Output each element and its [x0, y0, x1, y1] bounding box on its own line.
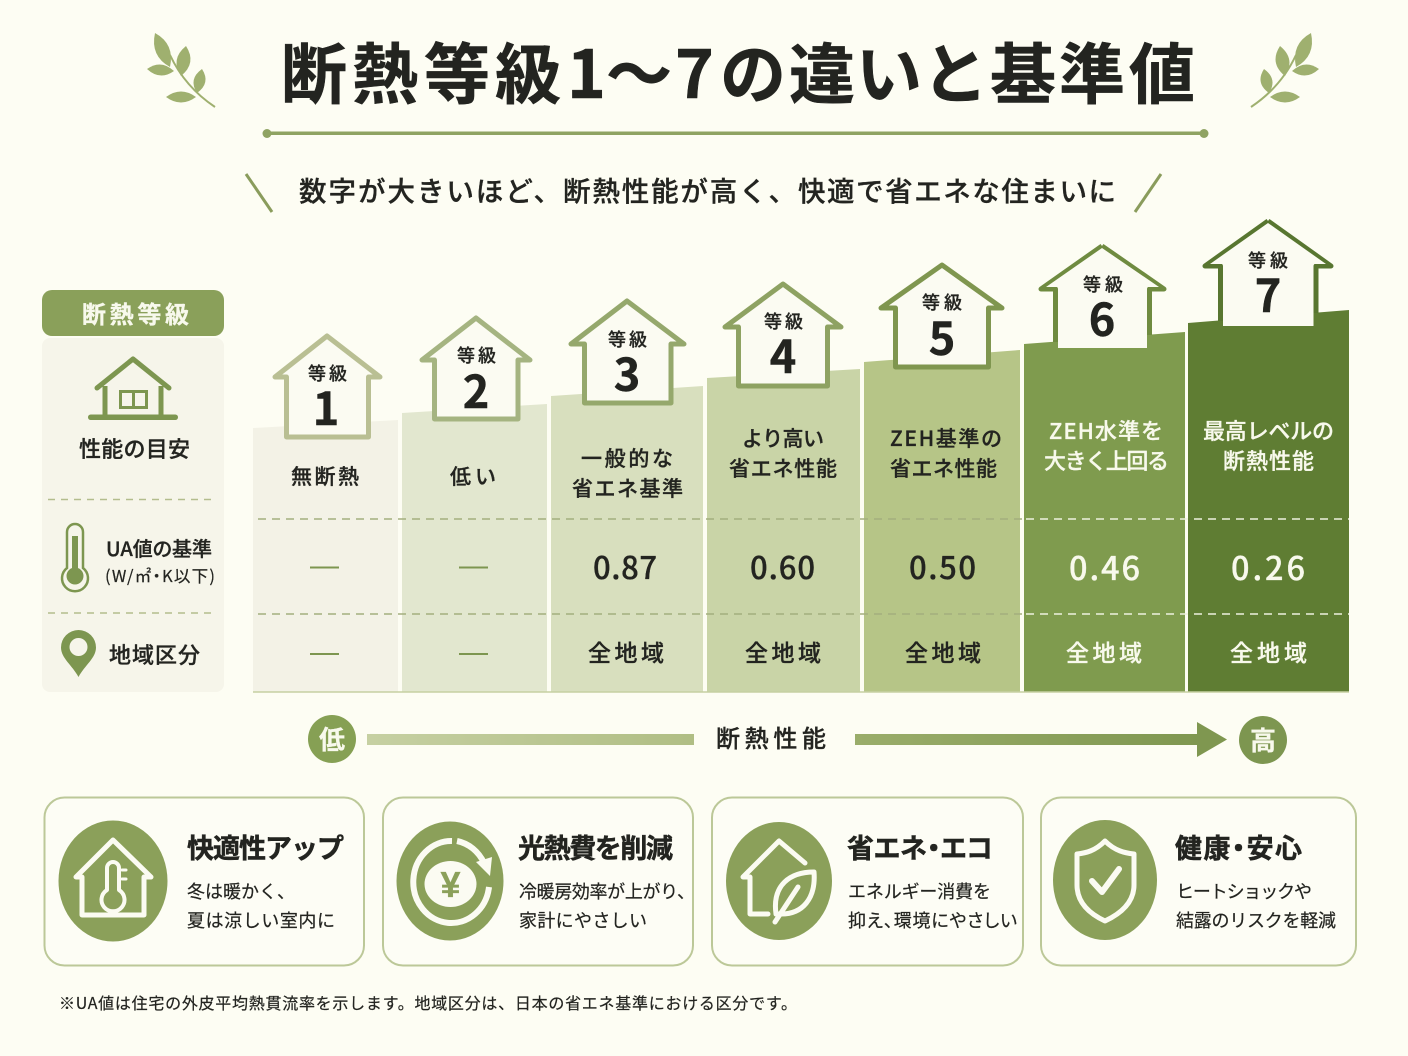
title: と: [922, 22, 988, 118]
region row: [310, 634, 1307, 668]
column descriptions: 断熱性能: [1223, 444, 1314, 476]
title: 7: [675, 22, 714, 118]
card: health: [1041, 798, 1356, 966]
icon: map pin: [61, 630, 96, 677]
label: UA値の基準: UA値の基準: [106, 533, 212, 562]
house badge: grade 5: 5: [929, 303, 955, 368]
title: 1: [567, 22, 606, 118]
house badge: grade 5: [881, 265, 1002, 368]
card: energy cost: 家計にやさしい: [519, 907, 647, 933]
card: comfort: [44, 798, 364, 966]
column descriptions: 一般的な: [581, 443, 673, 473]
column: grade 4: [707, 369, 860, 692]
UA values row: 0.87: [593, 543, 657, 588]
house badge: grade 7: 7: [1255, 260, 1281, 325]
house badge: grade 5: 等級: [922, 289, 962, 315]
UA values row: 0.50: [909, 543, 976, 588]
title: い: [856, 22, 922, 118]
card: comfort: 冬は暖かく、: [187, 878, 295, 904]
house badge: grade 2: [422, 318, 530, 421]
panel: row labels: [42, 290, 224, 692]
house badge: grade 3: 等級: [608, 326, 647, 352]
icon: house with thermometer: [76, 840, 151, 915]
icon: house: [88, 359, 178, 420]
house badge: grade 1: 1: [313, 373, 339, 438]
card: energy cost: [383, 798, 695, 966]
column descriptions: 最高レベルの: [1203, 414, 1334, 446]
title: 断: [281, 22, 347, 118]
card: energy saving: エネルギー消費を: [848, 878, 991, 904]
title: 違: [789, 22, 855, 118]
footnote: ※UA値は住宅の外皮平均熱貫流率を示します。地域区分は、日本の省エネ基準における区分です。: [59, 990, 797, 1014]
icon: house with leaf: [743, 841, 814, 922]
performance arrow: [308, 715, 1287, 764]
UA values row: 0.26: [1231, 543, 1305, 590]
card: health: 健康・安心: [1175, 827, 1302, 866]
house badge: grade 4: 等級: [764, 308, 803, 334]
card: health: 結露のリスクを軽減: [1176, 907, 1336, 933]
performance arrow: 低: [319, 720, 345, 757]
column: grade 2: [402, 404, 547, 692]
house badge: grade 3: [571, 301, 684, 404]
icon: right leaf sprig: [1251, 33, 1319, 107]
card: health: ヒートショックや: [1176, 878, 1312, 904]
card: energy cost: 冷暖房効率が上がり、: [519, 878, 695, 904]
icon: left leaf sprig: [147, 33, 215, 107]
card: comfort: 快適性アップ: [187, 827, 344, 866]
title: 等: [424, 22, 490, 118]
column descriptions: ZEH基準の: [890, 423, 1002, 453]
UA values row: 0.46: [1069, 543, 1140, 590]
column: grade 1: [253, 420, 398, 692]
house badge: grade 2: 2: [463, 356, 489, 421]
column descriptions: 省エネ基準: [572, 473, 683, 503]
column: grade 3: [551, 386, 703, 692]
card: energy saving: [712, 798, 1023, 966]
region row: 全地域: [588, 634, 664, 668]
card: energy cost: 光熱費を削減: [518, 827, 673, 866]
card: comfort: 夏は涼しい室内に: [187, 907, 335, 933]
label: 性能の目安: 性能の目安: [79, 432, 190, 464]
house badge: grade 6: [1041, 246, 1164, 349]
house badge: grade 6: 等級: [1083, 271, 1123, 297]
icon: thermometer: [62, 524, 88, 591]
region row: 全地域: [1230, 634, 1307, 668]
column: grade 7: [1188, 310, 1349, 692]
title: 基: [990, 22, 1056, 118]
UA values row: [310, 543, 1305, 590]
region row: 全地域: [1066, 634, 1142, 668]
house badge: grade 1: 等級: [308, 360, 347, 386]
column descriptions: [291, 414, 1334, 503]
subtitle: 断熱性能が高く、: [563, 169, 796, 209]
region row: 全地域: [745, 634, 821, 668]
column descriptions: ZEH水準を: [1049, 414, 1163, 446]
heading: 断熱等級: 断熱等級: [82, 295, 189, 330]
title: ～: [606, 22, 672, 118]
label: unit: (W/㎡・K以下): [105, 563, 215, 587]
house badge: grade 4: 4: [770, 321, 796, 386]
subtitle: 快適で省エネな住まいに: [798, 169, 1116, 209]
subtitle: [246, 169, 1161, 212]
card: energy saving: 省エネ・エコ: [847, 827, 993, 866]
column: grade 6: [1024, 332, 1185, 692]
title: 級: [495, 22, 561, 118]
title: の: [720, 22, 786, 118]
house badge: grade 7: [1205, 221, 1331, 326]
column descriptions: 省エネ性能: [729, 453, 837, 483]
performance arrow: 断熱性能: [716, 719, 826, 754]
column: grade 5: [864, 350, 1020, 692]
region row: 全地域: [905, 634, 981, 668]
title underline: [262, 129, 1208, 138]
house badge: grade 2: 等級: [457, 342, 496, 368]
house badge: grade 4: [725, 284, 841, 386]
subtitle: 数字が大きいほど、: [299, 169, 561, 209]
UA values row: 0.60: [750, 543, 815, 588]
title: 値: [1129, 22, 1195, 118]
house badge: grade 6: 6: [1089, 284, 1115, 349]
label: 地域区分: 地域区分: [109, 638, 200, 670]
house badge: grade 3: 3: [614, 339, 640, 404]
icon: yen cycle: [413, 841, 492, 923]
title: 準: [1059, 22, 1125, 118]
icon: shield with check: [1077, 841, 1134, 921]
house badge: grade 1: [275, 336, 380, 438]
performance arrow: 高: [1250, 721, 1276, 758]
card: energy saving: 抑え、環境にやさしい: [848, 907, 1017, 933]
column descriptions: 低い: [450, 461, 496, 491]
column descriptions: 省エネ性能: [890, 453, 997, 483]
column descriptions: 無断熱: [291, 461, 359, 491]
column descriptions: より高い: [742, 423, 824, 453]
house badge: grade 7: 等級: [1248, 247, 1288, 273]
column descriptions: 大きく上回る: [1044, 444, 1169, 476]
icon: yen cycle: ¥: [440, 864, 461, 905]
title: 熱: [352, 22, 418, 118]
